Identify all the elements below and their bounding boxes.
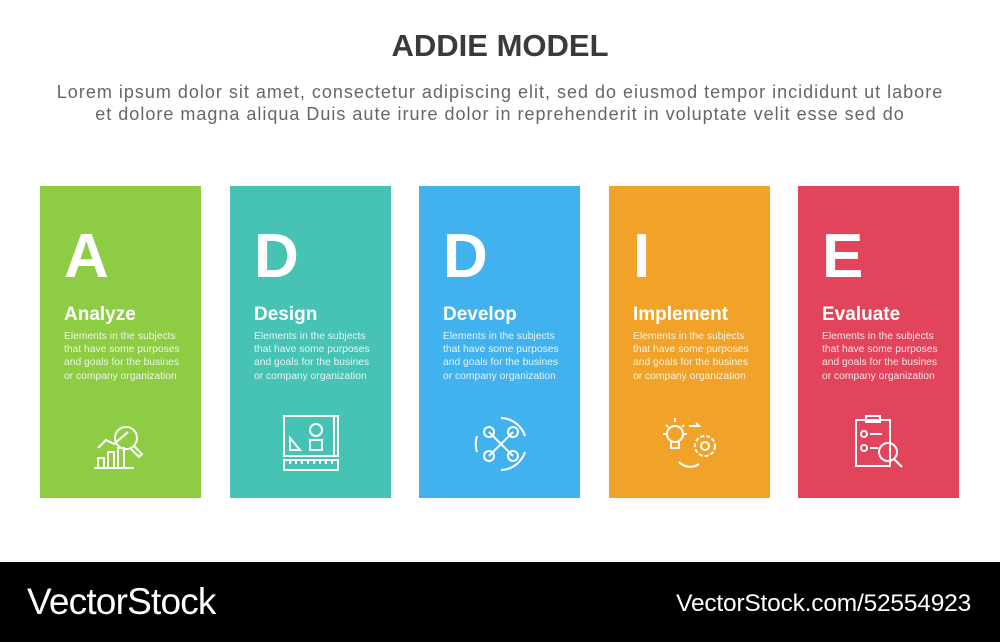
- panel: analyze: or company organization: [64, 371, 177, 382]
- panel: analyze: [40, 186, 201, 498]
- icon: tools: [474, 417, 526, 471]
- panel: implement: Implement: [633, 304, 728, 325]
- subtitle: [57, 82, 943, 124]
- panel: analyze: that have some purposes: [64, 344, 180, 355]
- panel: implement: or company organization: [633, 371, 746, 382]
- panel: analyze: Elements in the subjects: [64, 331, 176, 342]
- panel: evaluate: Evaluate: [822, 304, 900, 325]
- panel: evaluate: Elements in the subjects: [822, 331, 934, 342]
- icon: bulb gear: [663, 418, 716, 468]
- panel: evaluate: and goals for the busines: [822, 357, 937, 368]
- panel: analyze: A: [64, 222, 109, 291]
- panel: implement: and goals for the busines: [633, 357, 748, 368]
- panel: design: Design: [254, 304, 317, 325]
- panel: design: Elements in the subjects: [254, 331, 366, 342]
- panel: design: that have some purposes: [254, 344, 370, 355]
- panel: implement: I: [633, 222, 650, 291]
- panel: develop: Elements in the subjects: [443, 331, 555, 342]
- panel: develop: and goals for the busines: [443, 357, 558, 368]
- panel: design: D: [254, 222, 299, 291]
- icon: clipboard magnifier: [855, 415, 903, 468]
- panel: evaluate: E: [822, 222, 863, 291]
- panel: implement: [609, 186, 770, 498]
- panel: develop: or company organization: [443, 371, 556, 382]
- panel: develop: [419, 186, 580, 498]
- subtitle: et dolore magna aliqua Duis aute irure dolor in reprehenderit in voluptate velit esse sed do: [95, 104, 905, 124]
- panel: implement: that have some purposes: [633, 344, 749, 355]
- footer: [0, 562, 1000, 642]
- panel: develop: that have some purposes: [443, 344, 559, 355]
- panel: design: [230, 186, 391, 498]
- subtitle: Lorem ipsum dolor sit amet, consectetur adipiscing elit, sed do eiusmod tempor incididunt ut labore: [57, 82, 943, 102]
- panel: implement: Elements in the subjects: [633, 331, 745, 342]
- footer id: VectorStock.com/52554923: [676, 590, 971, 617]
- panel: evaluate: [798, 186, 959, 498]
- panel: develop: Develop: [443, 304, 517, 325]
- panel: develop: D: [443, 222, 488, 291]
- icon: chart magnifier: [94, 426, 144, 469]
- panel: evaluate: or company organization: [822, 371, 935, 382]
- panel: design: or company organization: [254, 371, 367, 382]
- title: ADDIE MODEL: [392, 28, 608, 63]
- panel: design: and goals for the busines: [254, 357, 369, 368]
- panel: analyze: and goals for the busines: [64, 357, 179, 368]
- panel: evaluate: that have some purposes: [822, 344, 938, 355]
- panel: analyze: Analyze: [64, 304, 136, 325]
- icon: blueprint: [283, 415, 339, 471]
- footer logo: VectorStock: [27, 581, 216, 622]
